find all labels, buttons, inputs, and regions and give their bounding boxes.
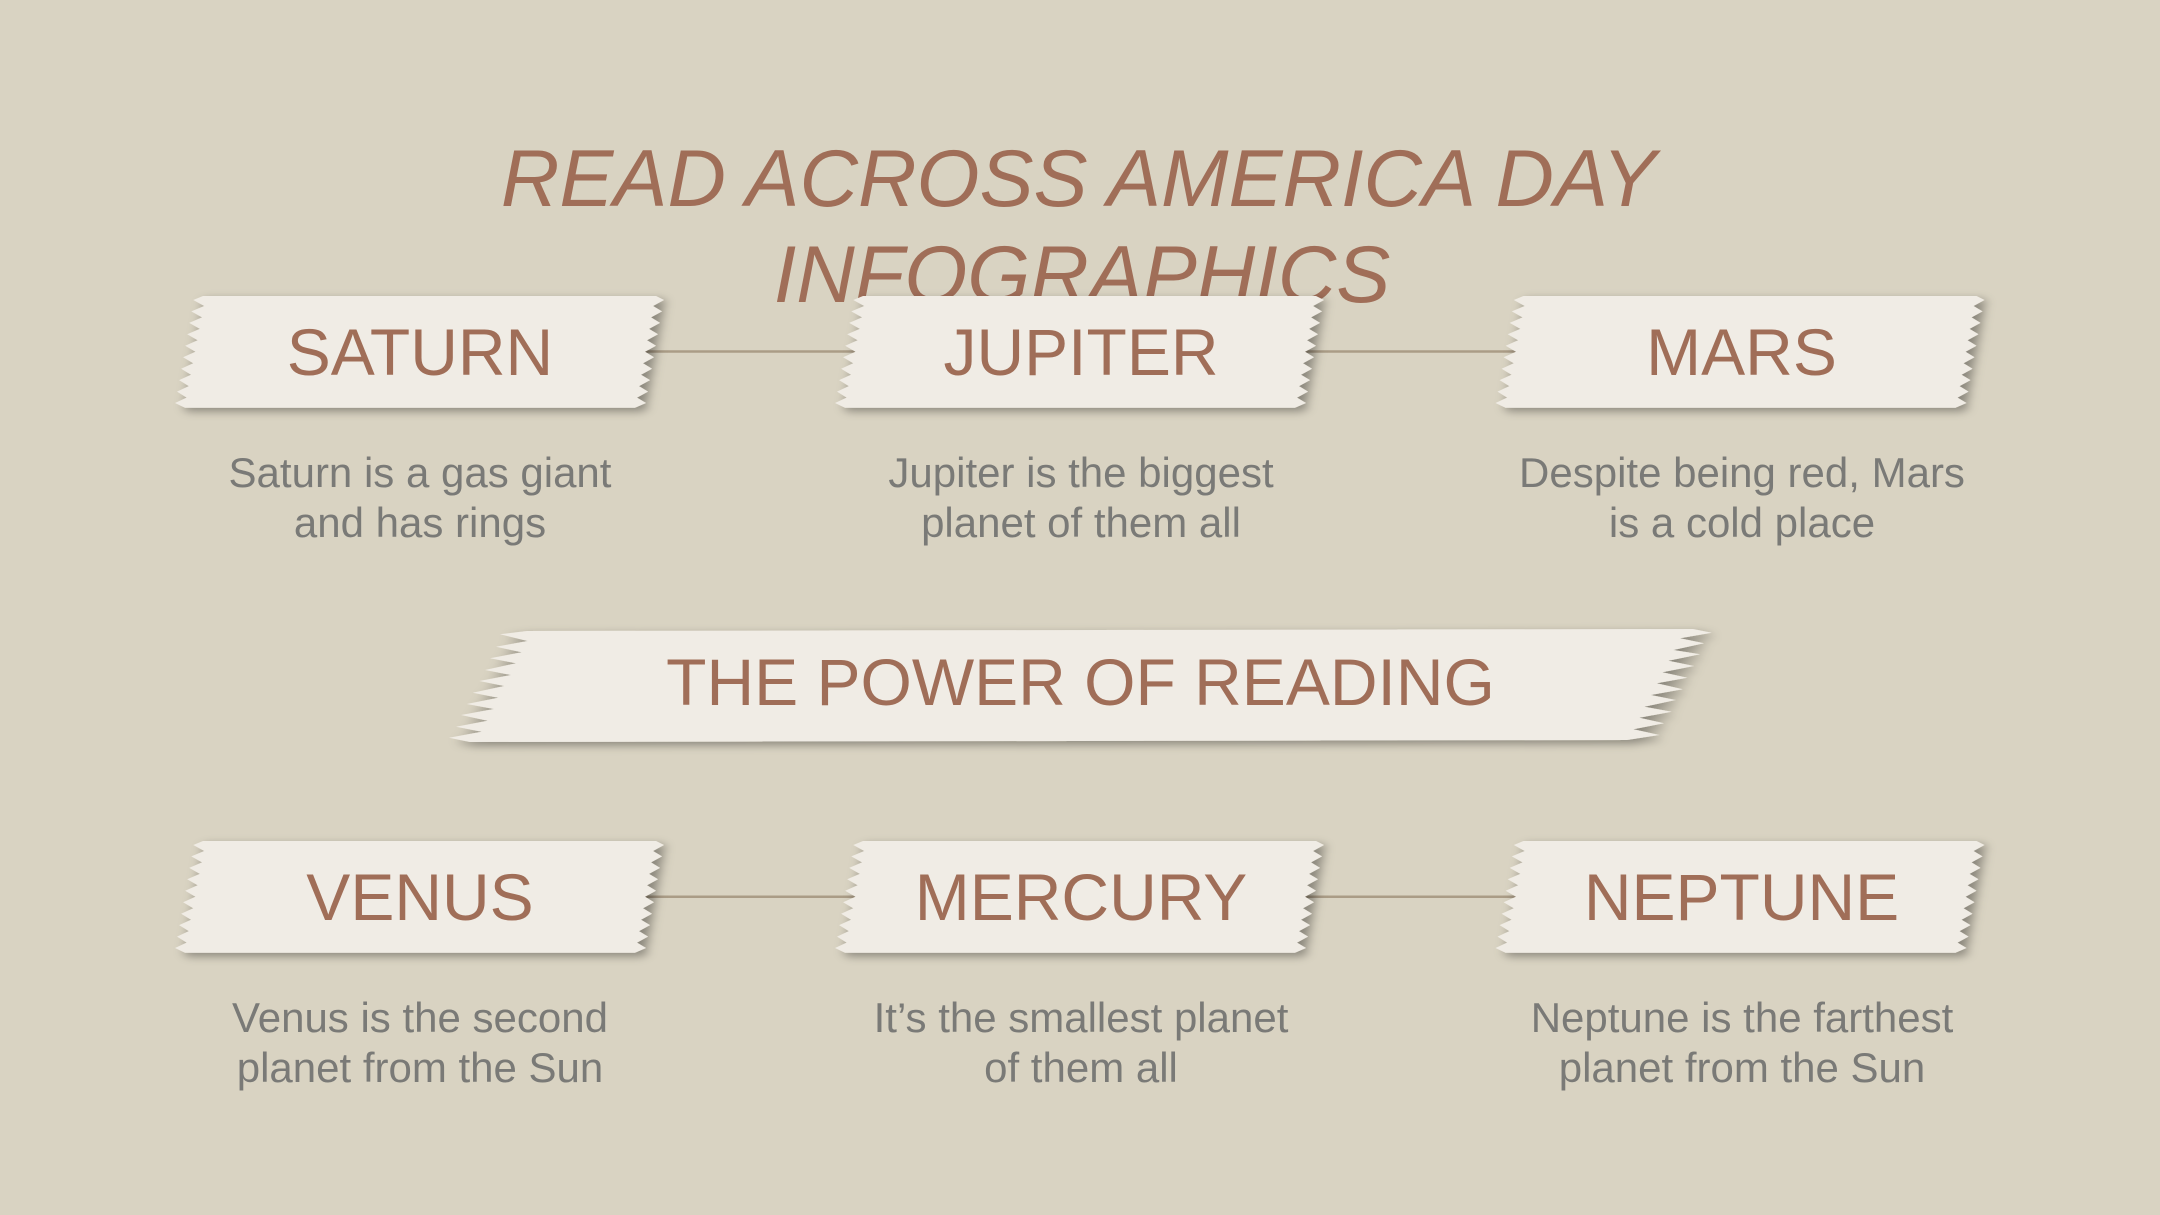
text: Mars description: Despite being red, Mars bbox=[1519, 449, 1965, 496]
heading: Saturn: SATURN bbox=[287, 315, 553, 389]
center banner bbox=[449, 629, 1712, 742]
heading: Neptune: NEPTUNE bbox=[1584, 860, 1899, 934]
text: Neptune description: Neptune is the farthest bbox=[1531, 994, 1953, 1041]
connector: Jupiter to Mars bbox=[1305, 350, 1517, 353]
text: Jupiter description: Jupiter is the biggest bbox=[888, 449, 1274, 496]
heading: Mercury: MERCURY bbox=[915, 860, 1247, 934]
heading: Venus: VENUS bbox=[306, 860, 534, 934]
heading: Mars: MARS bbox=[1646, 315, 1837, 389]
title: INFOGRAPHICS bbox=[774, 230, 1390, 320]
text: Venus description: planet from the Sun bbox=[237, 1044, 603, 1091]
panel: Jupiter bbox=[835, 296, 1324, 546]
connector: Venus to Mercury bbox=[645, 895, 856, 898]
text: Saturn description: Saturn is a gas giant bbox=[229, 449, 611, 496]
text: Neptune description: planet from the Sun bbox=[1559, 1044, 1925, 1091]
tape: Jupiter bbox=[835, 296, 1324, 408]
tape: Mars bbox=[1496, 296, 1984, 408]
connector: Saturn to Jupiter bbox=[645, 350, 856, 353]
text: Saturn description: and has rings bbox=[294, 499, 546, 546]
panel: Mercury bbox=[835, 841, 1324, 1091]
text: Venus description: Venus is the second bbox=[232, 994, 608, 1041]
title bbox=[501, 134, 1661, 320]
tape: center banner bbox=[449, 629, 1712, 742]
text: Mars description: is a cold place bbox=[1609, 499, 1875, 546]
text: Mercury description: It’s the smallest planet bbox=[874, 994, 1288, 1041]
text: Jupiter description: planet of them all bbox=[921, 499, 1241, 546]
tape: Neptune bbox=[1496, 841, 1984, 953]
tape: Venus bbox=[175, 841, 664, 953]
panel: Saturn bbox=[175, 296, 664, 546]
panel: Venus bbox=[175, 841, 664, 1091]
tape: Saturn bbox=[175, 296, 664, 408]
tape: Mercury bbox=[835, 841, 1324, 953]
heading: The power of reading: THE POWER OF READING bbox=[666, 645, 1495, 719]
title: READ ACROSS AMERICA DAY bbox=[501, 134, 1661, 224]
panel: Neptune bbox=[1496, 841, 1984, 1091]
text: Mercury description: of them all bbox=[984, 1044, 1178, 1091]
panel: Mars bbox=[1496, 296, 1984, 546]
heading: Jupiter: JUPITER bbox=[943, 315, 1219, 389]
connector: Mercury to Neptune bbox=[1305, 895, 1517, 898]
